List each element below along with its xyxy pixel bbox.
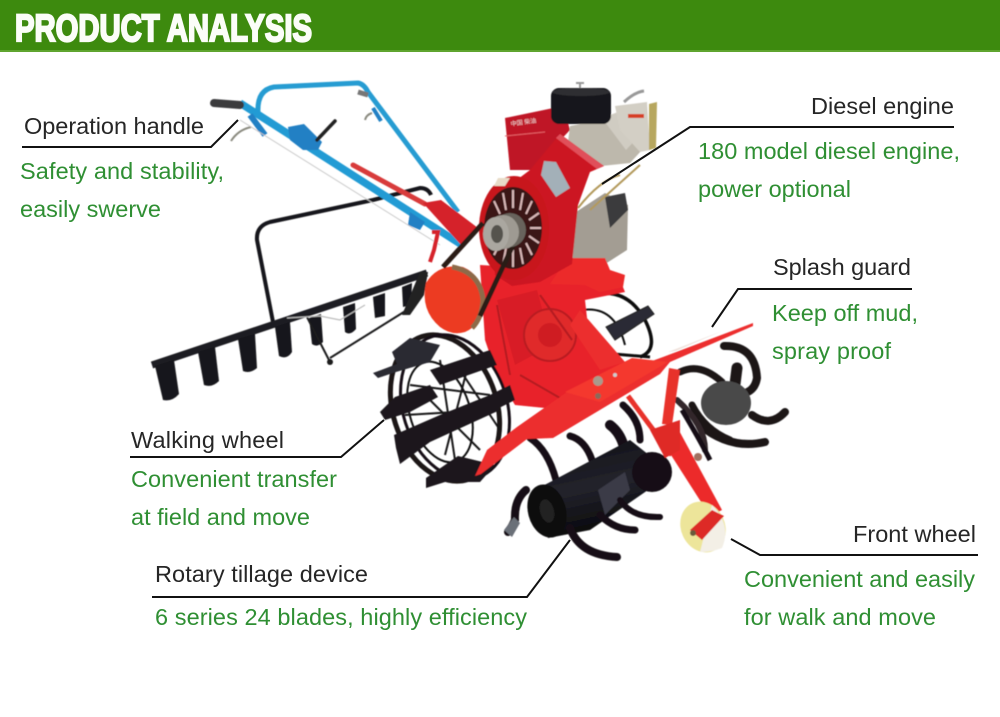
- air filter: [551, 88, 611, 124]
- callout: walking wheel: Convenient transfer: [131, 466, 337, 492]
- rear harrow rack: [152, 188, 431, 400]
- engine body: [490, 134, 604, 286]
- red pulley cover: [425, 266, 484, 333]
- callout: walking wheel: at field and move: [131, 504, 310, 530]
- callout: diesel engine: [602, 93, 960, 202]
- callout: front wheel: Front wheel: [853, 521, 976, 547]
- rear rotary blades: [677, 346, 785, 485]
- pulley and V-belts: [443, 213, 526, 316]
- flywheel cover: [479, 176, 549, 280]
- title: PRODUCT ANALYSIS: [15, 8, 312, 50]
- callout: diesel engine: power optional: [698, 176, 851, 202]
- callout: rotary tillage device: 6 series 24 blades, highly efficiency: [155, 604, 527, 630]
- front rotary tiller: [504, 405, 672, 557]
- callout: splash guard: spray proof: [772, 338, 891, 364]
- wheel side transmission housing: [480, 265, 625, 408]
- back walking wheel: [582, 293, 654, 357]
- callout: walking wheel: [130, 420, 384, 530]
- clutch and levers: [288, 124, 322, 150]
- cylinder head: [568, 118, 642, 167]
- nameplate: [541, 161, 570, 197]
- diesel engine: 中国 柴油: [510, 116, 537, 128]
- engine mount: [550, 258, 625, 292]
- header banner: [0, 0, 1000, 52]
- callout: splash guard: Keep off mud,: [772, 300, 918, 326]
- blue operation handle: [214, 83, 478, 262]
- callout: walking wheel: Walking wheel: [131, 427, 284, 453]
- callout: front wheel: for walk and move: [744, 604, 936, 630]
- wheel support arm: [628, 368, 722, 516]
- callout: rotary tillage device: [152, 540, 570, 630]
- red splash guard: [475, 323, 753, 476]
- callout: splash guard: Splash guard: [773, 254, 911, 280]
- callout: diesel engine: 180 model diesel engine,: [698, 138, 960, 164]
- callout: operation handle: easily swerve: [20, 196, 161, 222]
- callout: rotary tillage device: Rotary tillage device: [155, 561, 368, 587]
- callout: operation handle: [20, 113, 238, 222]
- left walking wheel: [372, 321, 527, 495]
- machine illustration: mini tiller: [152, 83, 785, 560]
- callout: diesel engine: Diesel engine: [811, 93, 954, 119]
- red shift lever: [353, 165, 425, 204]
- callout: front wheel: Convenient and easily: [744, 566, 975, 592]
- callout: front wheel: [731, 521, 978, 630]
- callout: operation handle: Safety and stability,: [20, 158, 224, 184]
- fuel tank: [505, 106, 570, 170]
- callout: operation handle: Operation handle: [24, 113, 204, 139]
- lower crankcase: [572, 193, 628, 266]
- front wheel: [672, 494, 734, 560]
- callout: splash guard: [712, 254, 918, 364]
- diesel engine: [479, 83, 657, 292]
